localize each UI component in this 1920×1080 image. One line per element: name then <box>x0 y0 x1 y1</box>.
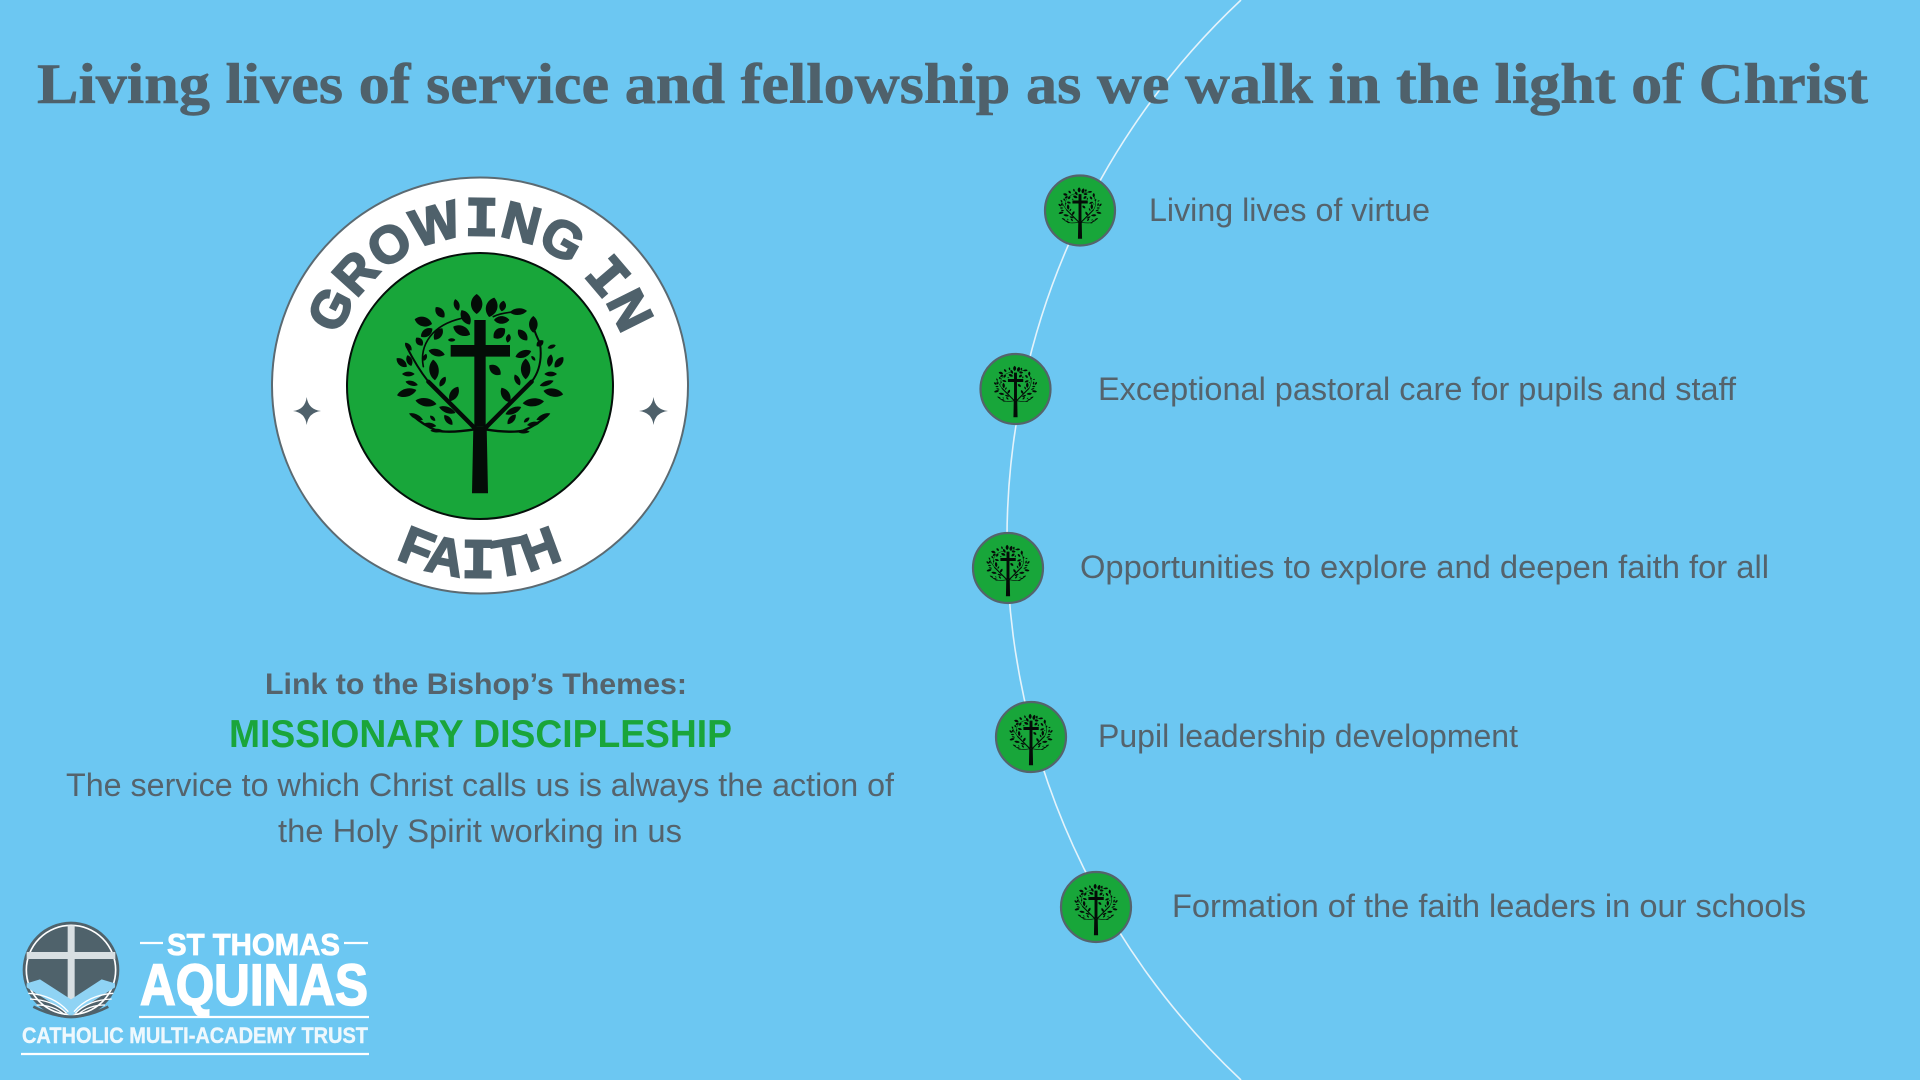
logo line: Trust: CATHOLIC MULTI-ACADEMY TRUST <box>22 1023 369 1048</box>
node icon <box>996 702 1066 772</box>
logo line: St Thomas: ST THOMAS <box>167 927 340 962</box>
logo rules <box>21 943 369 1054</box>
theme description line 1: The service to which Christ calls us is always the action of <box>66 767 894 803</box>
node icon <box>1061 872 1131 942</box>
logo line: Aquinas: AQUINAS <box>140 953 368 1018</box>
theme description line 2: the Holy Spirit working in us <box>278 813 682 849</box>
item text: Pupil leadership development <box>1098 718 1518 754</box>
timeline arc <box>1007 0 1241 1080</box>
list item 3 <box>973 533 1769 603</box>
list item 1 <box>1045 176 1430 246</box>
item text: Living lives of virtue <box>1149 192 1430 228</box>
icon: left star <box>293 397 321 425</box>
badge: Growing in Faith <box>271 176 689 594</box>
ring text top: GROWING IN <box>310 197 654 333</box>
icon: right star <box>639 397 668 425</box>
item text: Opportunities to explore and deepen faith for all <box>1080 549 1769 585</box>
list item 5 <box>1061 872 1806 942</box>
logo: St Thomas Aquinas <box>21 922 369 1054</box>
node icon <box>973 533 1043 603</box>
item text: Formation of the faith leaders in our schools <box>1172 888 1806 924</box>
icon: tree with cross <box>394 294 566 493</box>
list item 2 <box>980 354 1736 424</box>
theme name: MISSIONARY DISCIPLESHIP <box>229 713 732 756</box>
item text: Exceptional pastoral care for pupils and staff <box>1098 371 1736 407</box>
title: Living lives of service and fellowship as we walk in the light of Christ <box>37 53 1868 116</box>
list item 4 <box>996 702 1518 772</box>
node icon <box>1045 176 1115 246</box>
badge ring <box>272 178 688 594</box>
ring text bottom: FAITH <box>398 525 562 579</box>
logo emblem <box>23 922 119 1018</box>
badge green centre <box>347 253 613 519</box>
text block: Bishop's themes <box>66 668 894 849</box>
link heading: Link to the Bishop’s Themes: <box>265 668 687 701</box>
node icon <box>980 354 1050 424</box>
